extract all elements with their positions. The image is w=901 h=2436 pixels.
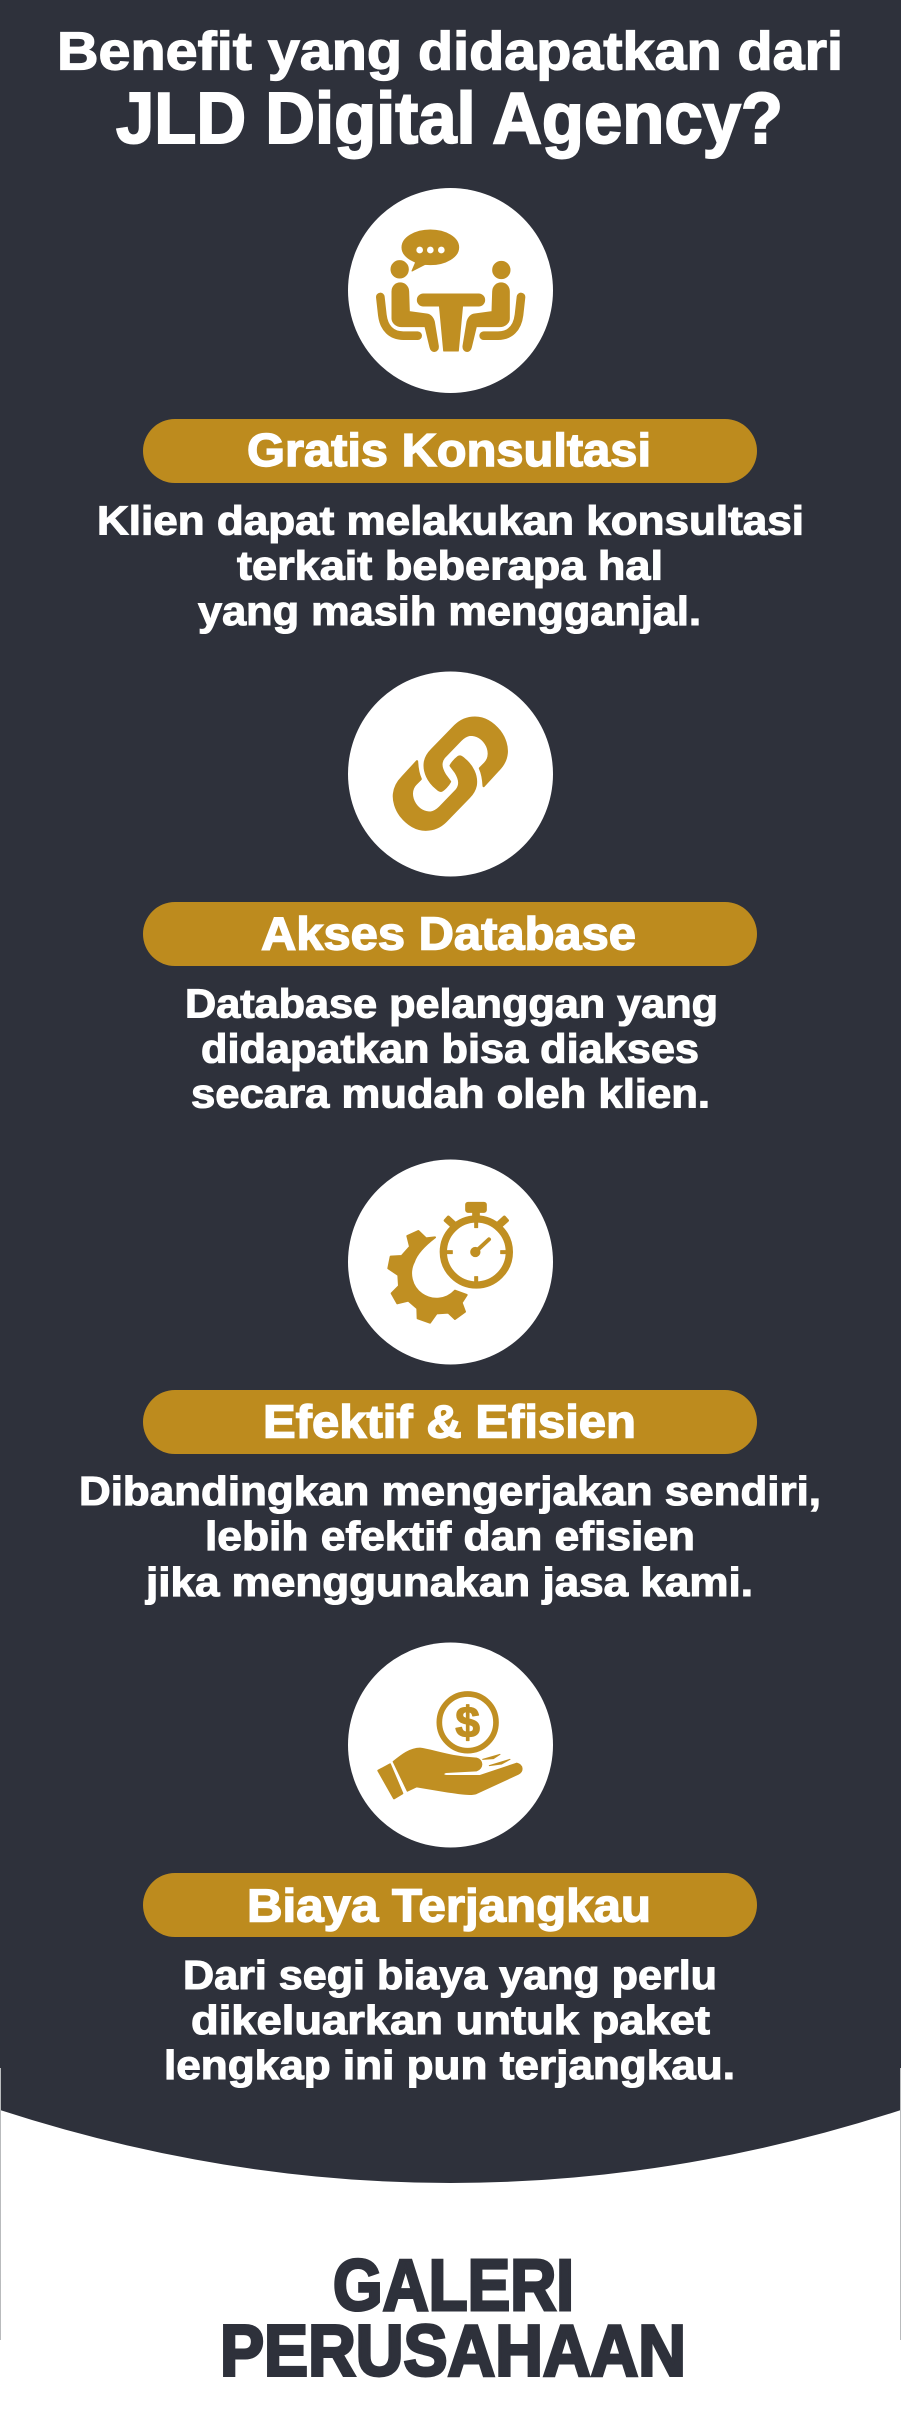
heading pill: Gratis Konsultasi [247, 424, 651, 476]
description text: Dari segi biaya yang perlu [183, 1952, 717, 1998]
description text [185, 980, 718, 1116]
heading pill: Efektif & Efisien [263, 1396, 636, 1448]
description text: Klien dapat melakukan konsultasi [97, 498, 804, 544]
description text [97, 498, 804, 634]
description text: lebih efektif dan efisien [205, 1513, 695, 1559]
icon: hand holding coin: $ [455, 1698, 480, 1747]
heading pill [143, 902, 757, 966]
title: JLD Digital Agency? [116, 79, 783, 159]
description text [164, 1952, 735, 2088]
description text: lengkap ini pun terjangkau. [164, 2042, 735, 2088]
description text: Database pelanggan yang [185, 980, 718, 1026]
gallery heading: GALERI [333, 2246, 574, 2326]
icon: meeting at table [348, 188, 553, 393]
gallery heading [220, 2246, 686, 2392]
heading pill [143, 419, 757, 483]
description text: jika menggunakan jasa kami. [145, 1559, 753, 1605]
title [57, 22, 843, 159]
heading pill [143, 1390, 757, 1454]
gallery heading: PERUSAHAAN [220, 2312, 686, 2392]
description text [79, 1468, 821, 1605]
heading pill [143, 1873, 757, 1937]
heading pill: Akses Database [261, 908, 636, 960]
thin right edge line [900, 2068, 901, 2340]
description text: secara mudah oleh klien. [191, 1070, 710, 1116]
title: Benefit yang didapatkan dari [57, 22, 843, 82]
description text: yang masih mengganjal. [198, 588, 701, 634]
panel: gratis konsultasi [97, 188, 804, 634]
thin left edge line [0, 2068, 1, 2340]
icon: hand holding coin [348, 1642, 553, 1848]
description text: terkait beberapa hal [237, 542, 663, 588]
icon: gear and stopwatch [348, 1160, 553, 1364]
icon: chain link [348, 672, 553, 876]
description text: didapatkan bisa diakses [201, 1026, 699, 1072]
heading pill: Biaya Terjangkau [247, 1880, 651, 1932]
description text: Dibandingkan mengerjakan sendiri, [79, 1468, 821, 1514]
panel: akses database [143, 672, 757, 1116]
description text: dikeluarkan untuk paket [191, 1997, 710, 2043]
panel: efektif dan efisien [79, 1160, 821, 1605]
panel: biaya terjangkau [143, 1642, 757, 2088]
